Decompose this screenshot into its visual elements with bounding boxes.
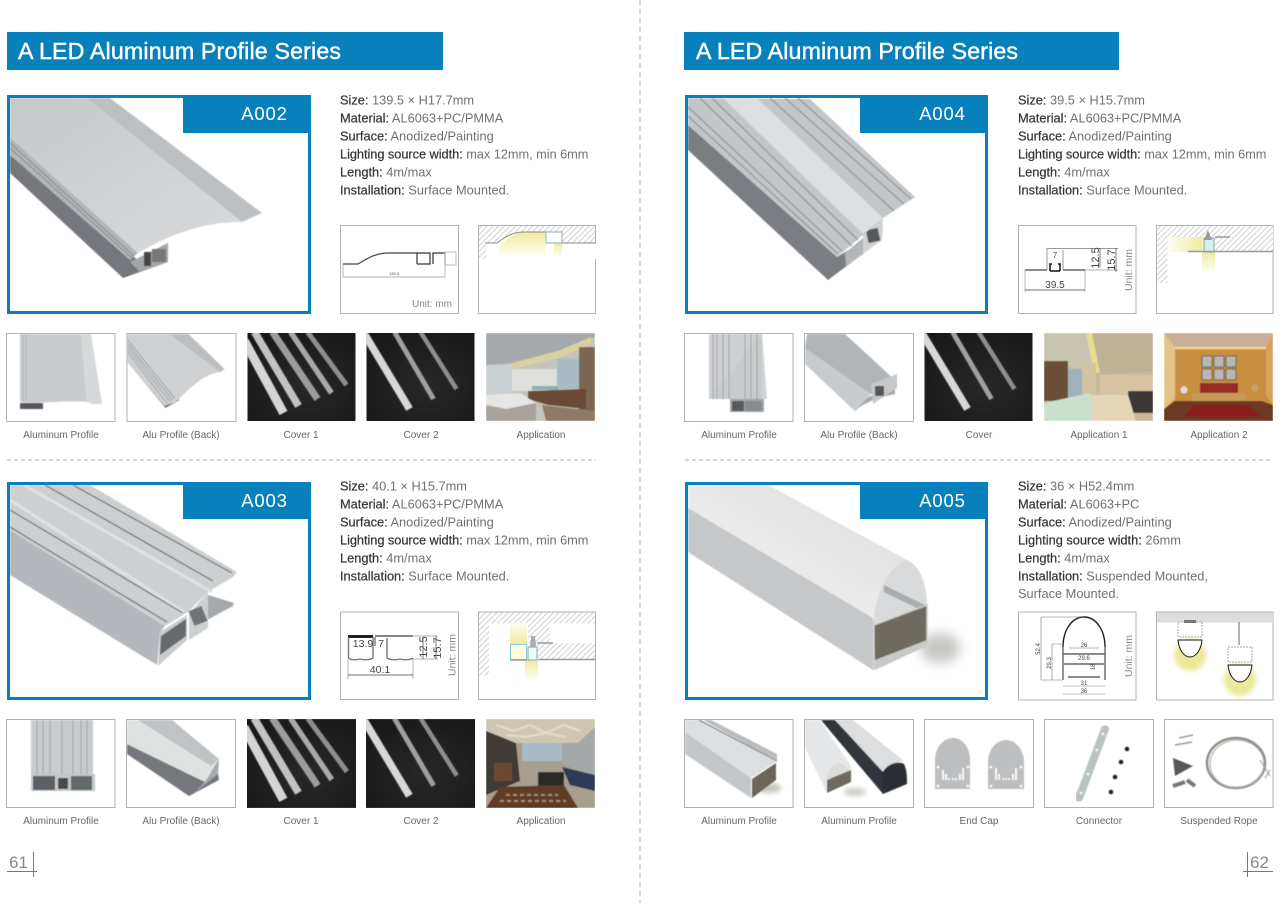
model tag A004: [860, 95, 988, 133]
dimension drawing A005: [1018, 612, 1136, 700]
thumbnail: Cover 1 A003: Cover 1: [283, 816, 319, 827]
thumbnail: End Cap: End Cap: [960, 816, 999, 827]
heading banner right: [684, 32, 1119, 70]
dimension drawing A005: 26: [1081, 643, 1088, 649]
panel: A002 main photo: [8, 95, 311, 312]
thumbnail: Cover 1 A002: Cover 1: [283, 430, 319, 441]
thumbnail: Aluminum Profile A003: Aluminum Profile: [23, 816, 99, 827]
spec text A004: Lighting source width: max 12mm, min 6mm: [1018, 146, 1266, 162]
dimension drawing A004: 39.5: [1045, 280, 1065, 291]
thumbnail: Suspended Rope: [1164, 720, 1273, 827]
installation drawing A005: [1156, 612, 1273, 700]
spec text A003: Installation: Surface Mounted.: [340, 568, 509, 584]
thumbnail: Application A002: Application: [517, 430, 565, 441]
dimension drawing A005: 18: [1091, 663, 1097, 670]
spec text A003: Lighting source width: max 12mm, min 6mm: [340, 532, 588, 548]
thumbnail: Application 2 A004: [1164, 333, 1273, 441]
dimension drawing A005: 36: [1081, 689, 1088, 695]
thumbnail: Aluminum Profile A002: [6, 334, 115, 441]
thumbnail row A004: [684, 332, 1273, 441]
thumbnail: Cover 2 A003: [364, 718, 475, 827]
thumbnail: Aluminum Profile black and white A005: [804, 720, 914, 827]
page number 62: [1243, 852, 1273, 877]
spec text A004: Material: AL6063+PC/PMMA: [1018, 110, 1181, 126]
dimension drawing A005: 29.3: [1047, 657, 1053, 669]
heading banner right: A LED Aluminum Profile Series: [696, 38, 1018, 64]
installation drawing A002: [478, 226, 596, 314]
heading banner left: A LED Aluminum Profile Series: [18, 38, 341, 64]
dimension drawing A005: 52.4: [1036, 643, 1042, 655]
thumbnail row A002: [6, 332, 595, 441]
thumbnail: Aluminum Profile black and white A005: Aluminum Profile: [821, 816, 897, 827]
dimension drawing A005: Unit: mm: [1123, 635, 1135, 677]
thumbnail: Aluminum Profile A004: [684, 334, 793, 441]
spec text A002: Surface: Anodized/Painting: [340, 128, 494, 144]
thumbnail: Aluminum Profile A003: [6, 720, 115, 827]
thumbnail: Application A003: [486, 719, 595, 827]
thumbnail: Cover A004: [922, 332, 1032, 441]
thumbnail: Alu Profile Back A003: [126, 720, 236, 827]
spec text A004: Installation: Surface Mounted.: [1018, 182, 1187, 198]
dimension drawing A003: 7: [378, 638, 384, 650]
thumbnail: End Cap: [924, 720, 1034, 827]
spec text A005: Installation: Suspended Mounted,: [1018, 568, 1208, 584]
dimension drawing A002: Unit: mm: [412, 299, 452, 310]
page number 61: 61: [9, 853, 28, 872]
model tag A002: A002: [241, 103, 288, 124]
dimension drawing A003: 15.7: [432, 637, 444, 659]
panel: A005 main photo: [686, 482, 988, 698]
dimension drawing A003: [340, 612, 458, 700]
model tag A005: A005: [919, 490, 966, 511]
dimension drawing A004: Unit: mm: [1123, 249, 1135, 291]
thumbnail: Connector: [1044, 720, 1154, 827]
dimension drawing A005: 29.6: [1078, 656, 1090, 662]
thumbnail: Application 2 A004: Application 2: [1190, 430, 1248, 441]
spec text A005: Material: AL6063+PC: [1018, 496, 1139, 512]
spec text A004: Surface: Anodized/Painting: [1018, 128, 1172, 144]
model tag A002: [183, 95, 311, 133]
dimension drawing A003: 13.9: [353, 638, 373, 650]
model tag A005: [860, 482, 988, 519]
spec text A003: Material: AL6063+PC/PMMA: [340, 496, 503, 512]
thumbnail: Cover 2 A002: [364, 332, 474, 441]
spec text A004: Size: 39.5 × H15.7mm: [1018, 92, 1145, 108]
spec text A004: Length: 4m/max: [1018, 164, 1110, 180]
centre fold dashed line: [639, 0, 641, 903]
page 62: [684, 32, 1273, 877]
dimension drawing A004: 12.5: [1090, 247, 1102, 269]
thumbnail: Cover 2 A002: Cover 2: [403, 430, 439, 441]
spec text A005: Lighting source width: 26mm: [1018, 532, 1181, 548]
dimension drawing A004: 15.7: [1106, 249, 1118, 271]
dimension drawing A003: Unit: mm: [446, 634, 458, 676]
spec text A005: Length: 4m/max: [1018, 550, 1110, 566]
spec text A003: Size: 40.1 × H15.7mm: [340, 478, 467, 494]
dimension drawing A005: 31: [1081, 681, 1088, 687]
thumbnail: Aluminum Profile A004: Aluminum Profile: [701, 430, 777, 441]
model tag A003: [183, 482, 311, 519]
dimension drawing A003: 12.5: [418, 636, 430, 658]
spec text A002: Material: AL6063+PC/PMMA: [340, 110, 503, 126]
spec text A002: Size: 139.5 × H17.7mm: [340, 92, 474, 108]
thumbnail: Application 1 A004: [1044, 333, 1153, 441]
page number 61: [7, 852, 37, 877]
spec text A002: Lighting source width: max 12mm, min 6mm: [340, 146, 588, 162]
dimension drawing A002: 139.5: [389, 271, 400, 276]
thumbnail: Cover 1 A003: [244, 718, 356, 827]
thumbnail: Suspended Rope: Suspended Rope: [1180, 816, 1258, 827]
thumbnail row A005: [684, 720, 1273, 827]
panel: A003 main photo: [8, 482, 311, 698]
thumbnail: Alu Profile Back A003: Alu Profile (Back): [142, 816, 220, 827]
thumbnail: Alu Profile Back A002: [127, 334, 236, 441]
spec text A005: Surface: Anodized/Painting: [1018, 514, 1172, 530]
panel: A004 main photo: [686, 95, 988, 312]
model tag A004: A004: [919, 103, 966, 124]
thumbnail: Application A003: Application: [517, 816, 565, 827]
dashed divider right: [685, 459, 1273, 461]
spec text A002: Installation: Surface Mounted.: [340, 182, 509, 198]
spec text A002: Length: 4m/max: [340, 164, 432, 180]
installation drawing A004: [1156, 226, 1273, 314]
heading banner left: [7, 32, 443, 70]
spec text A005: Surface Mounted.: [1018, 586, 1119, 601]
model tag A003: A003: [241, 490, 288, 511]
thumbnail: Cover 2 A003: Cover 2: [403, 816, 439, 827]
dimension drawing A004: 7: [1053, 251, 1058, 260]
dashed divider left: [7, 459, 596, 461]
dimension drawing A002: [340, 226, 458, 314]
thumbnail: Alu Profile Back A004: Alu Profile (Back): [820, 430, 898, 441]
page number 62: 62: [1250, 853, 1269, 872]
thumbnail: Connector: Connector: [1076, 816, 1123, 827]
spec text A003: Surface: Anodized/Painting: [340, 514, 494, 530]
thumbnail row A003: [6, 718, 595, 827]
page 61: [6, 32, 596, 877]
thumbnail: Aluminum Profile A005: [684, 720, 793, 827]
installation drawing A003: [478, 612, 596, 700]
spec text A003: Length: 4m/max: [340, 550, 432, 566]
thumbnail: Aluminum Profile A002: Aluminum Profile: [23, 430, 99, 441]
spec text A005: Size: 36 × H52.4mm: [1018, 478, 1134, 494]
dimension drawing A003: 40.1: [370, 664, 390, 676]
thumbnail: Alu Profile Back A004: [804, 334, 914, 441]
thumbnail: Alu Profile Back A002: Alu Profile (Back): [142, 430, 220, 441]
thumbnail: Cover A004: Cover: [966, 430, 993, 441]
thumbnail: Aluminum Profile A005: Aluminum Profile: [701, 816, 777, 827]
thumbnail: Application 1 A004: Application 1: [1070, 430, 1128, 441]
thumbnail: Application A002: [486, 333, 595, 441]
dimension drawing A004: [1018, 226, 1136, 314]
thumbnail: Cover 1 A002: [244, 332, 356, 441]
